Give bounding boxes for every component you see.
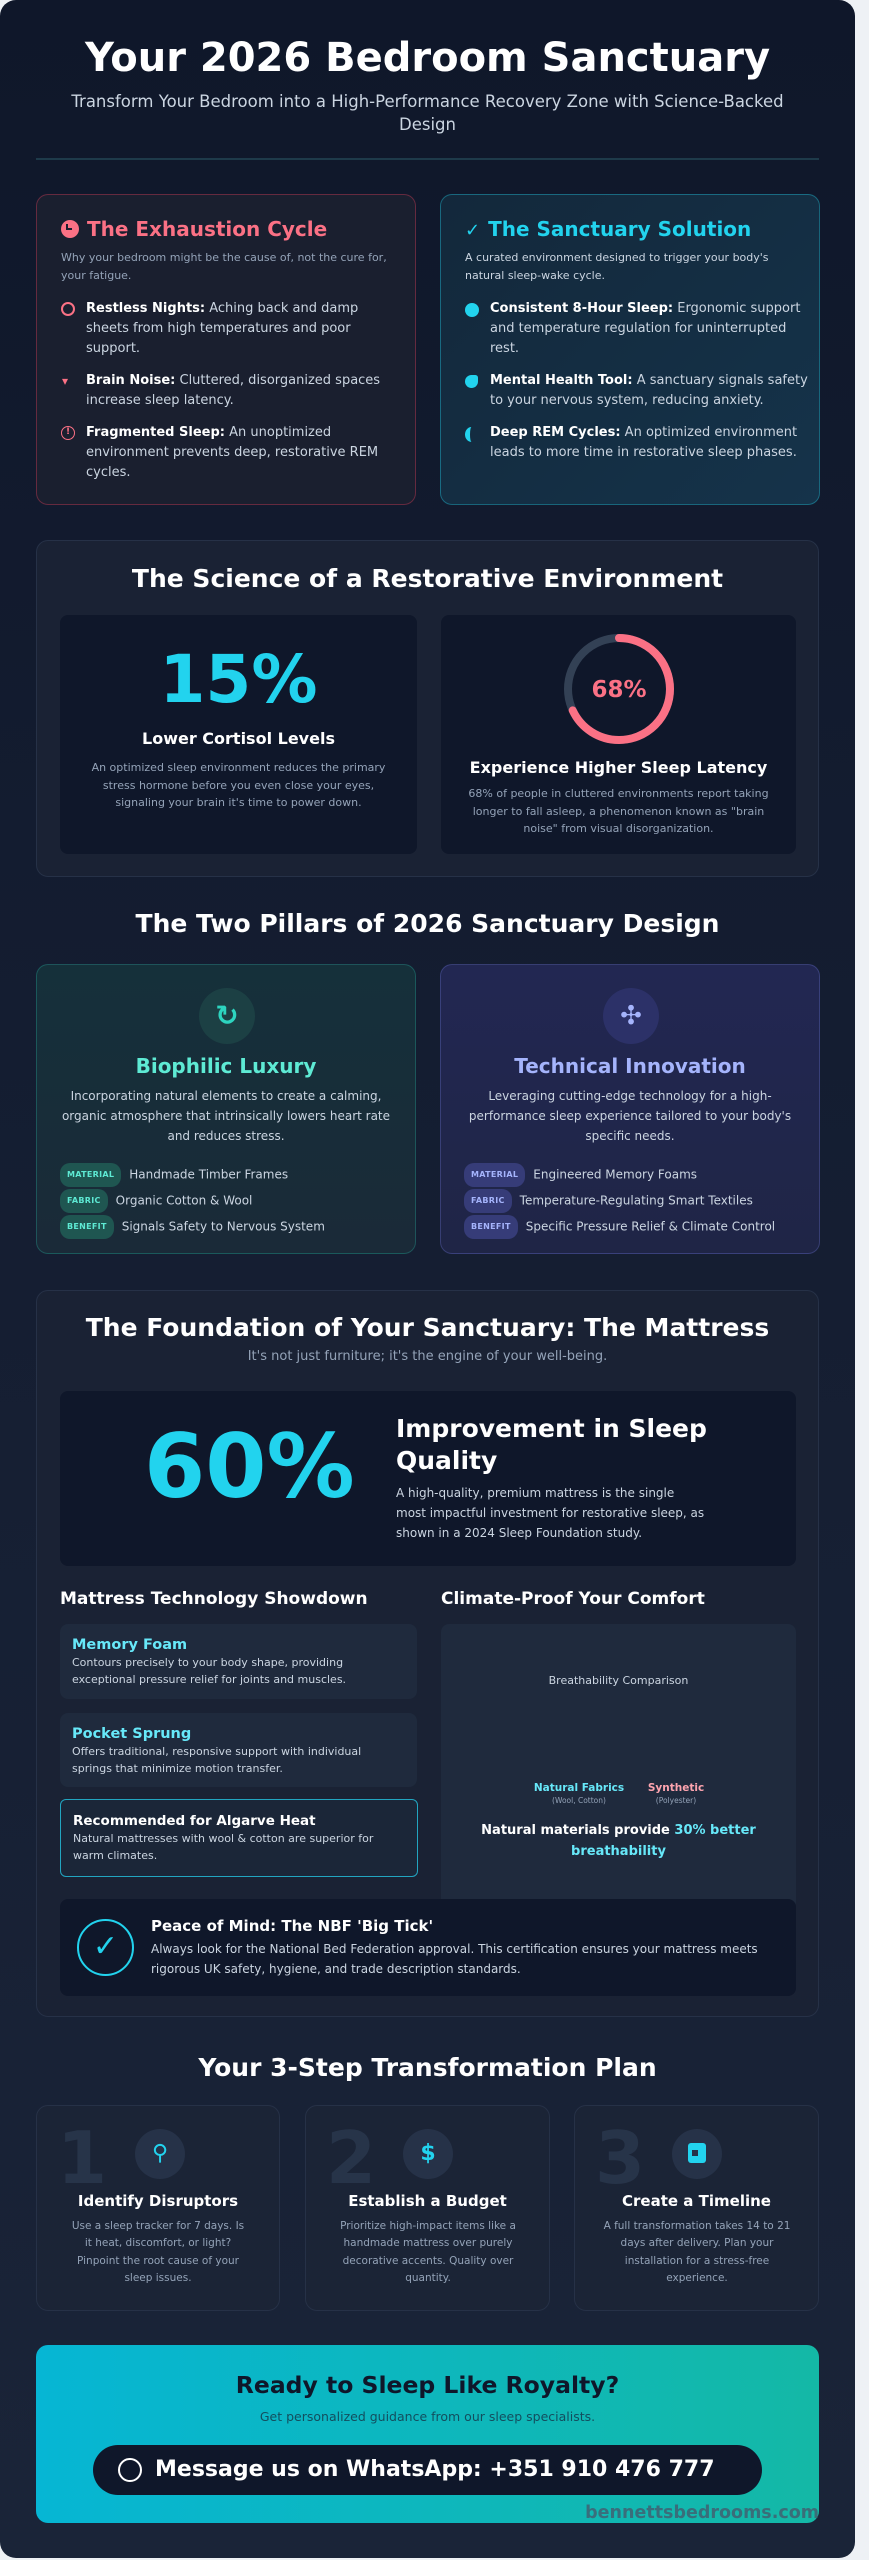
card: algarve heat [60,1799,418,1877]
chart: breathability: (Polyester) [656,1796,696,1805]
panel: biophilic luxury [36,964,416,1254]
text: exhaustion intro: Why your bedroom might be the cause of, not the cure for, your fatigue. [61,251,387,282]
tags: biophilic: Organic Cotton & Wool [116,1194,252,1208]
CTA panel: Ready to Sleep Like Royalty? [236,2371,619,2399]
card: memory foam: Memory Foam [72,1637,187,1653]
stat card: 60% [60,1391,796,1566]
panel: sanctuary solution [440,194,820,505]
icon: dollar: $ [420,2141,436,2166]
panel: technical innovation: Technical Innovation [514,1054,746,1078]
icon: chip [603,988,659,1044]
chart: breathability [441,1624,796,1910]
tags: biophilic: Signals Safety to Nervous System [122,1220,325,1234]
panel: science [36,540,819,877]
stat card: 15%: 15% [160,641,317,718]
step card 2 [305,2105,550,2311]
stat card: 60%: Improvement in Sleep Quality [396,1414,707,1475]
card: algarve heat: Natural mattresses with wool & cotton are superior for warm climates. [73,1832,373,1862]
panel: biophilic luxury: Incorporating natural elements to create a calming, organic atmosphere that intrinsically lowers heart rate and reduces stress. [62,1089,390,1143]
watermark: bennettsbedrooms.com [585,2503,819,2523]
step card 2: Prioritize high-impact items like a handmade mattress over purely decorative accents. Quality over quantity. [340,2220,516,2284]
icon: refresh: ↻ [215,999,239,1032]
heading: tech showdown: Mattress Technology Showdown [60,1589,368,1609]
card: pocket sprung: Offers traditional, responsive support with individual springs that minimize motion transfer. [72,1745,361,1775]
step card 2: 2 [326,2116,376,2200]
tags: technical: Specific Pressure Relief & Climate Control [526,1220,775,1234]
legend: (Wool, Cotton) [552,1796,606,1805]
stat card: 60%: A high-quality, premium mattress is the single most impactful investment for restorative sleep, as shown in a 2024 Sleep Foundation study. [396,1486,704,1540]
tags: biophilic: Handmade Timber Frames [129,1168,288,1182]
list: exhaustion items: ! [66,427,70,437]
card: pocket sprung [60,1713,417,1787]
heading: sanctuary solution: ✓ The Sanctuary Solution [465,217,751,241]
chart: breathability: Breathability Comparison [549,1674,688,1687]
step card 1: Identify Disruptors [78,2192,238,2210]
title: Your 2026 Bedroom Sanctuary [85,35,770,81]
tags: technical: MATERIAL [471,1170,518,1179]
icon: tick circle: ✓ [93,1929,118,1964]
callout: NBF big tick [60,1899,796,1996]
button: whatsapp [93,2445,762,2495]
icon: tick circle [77,1919,134,1976]
tags: technical: Engineered Memory Foams [533,1168,697,1182]
icon: refresh [199,988,255,1044]
step card 3: 3 [595,2116,645,2200]
step card 3: Create a Timeline [622,2192,771,2210]
chart: breathability: Natural materials provide 30% better breathability [481,1823,756,1859]
tags: biophilic: FABRIC [67,1196,101,1205]
panel: technical innovation: Leveraging cutting-edge technology for a high-performance sleep experience tailored to your body's specific needs. [469,1089,791,1143]
legend: Natural Fabrics [534,1782,624,1794]
CTA panel [36,2345,819,2523]
subtitle: Transform Your Bedroom into a High-Performance Recovery Zone with Science-Backed Design [71,92,784,134]
icon: chip: ✣ [620,1001,642,1031]
stat card: 15% [60,615,417,854]
tags: biophilic [60,1163,325,1239]
list: exhaustion items: ▾ [62,374,68,388]
icon: calendar [672,2129,722,2179]
list: exhaustion items: Fragmented Sleep: An unoptimized environment prevents deep, restorative REM cycles. [86,425,378,480]
icon: search: ⚲ [152,2141,168,2166]
list: exhaustion items [61,301,380,480]
heading: mattress: The Foundation of Your Sanctuary: The Mattress [86,1313,769,1342]
list: sanctuary items [465,301,808,460]
heading: climate: Climate-Proof Your Comfort [441,1589,705,1609]
panel: technical innovation [440,964,820,1254]
heading: exhaustion cycle: The Exhaustion Cycle [87,217,327,241]
stat card: 68% ring: Experience Higher Sleep Latency [470,758,767,777]
text: sanctuary intro: A curated environment designed to trigger your body's natural sleep-wake cycle. [465,251,769,282]
tags: biophilic: MATERIAL [67,1170,114,1179]
chart: 68% ring: 68% [591,677,647,703]
card: pocket sprung: Pocket Sprung [72,1726,191,1742]
step card 1: 1 [57,2116,107,2200]
list: sanctuary items: Deep REM Cycles: An optimized environment leads to more time in restorative sleep phases. [490,425,797,460]
step card 2: Establish a Budget [348,2192,507,2210]
heading: two pillars: The Two Pillars of 2026 Sanctuary Design [136,909,719,938]
stat card: 15%: An optimized sleep environment reduces the primary stress hormone before you even close your eyes, signaling your brain it's time to power down. [92,761,385,809]
panel: mattress foundation: It's not just furniture; it's the engine of your well-being. [248,1349,607,1364]
heading: science: The Science of a Restorative Environment [132,564,723,593]
tags: technical [464,1163,775,1239]
icon: search [135,2129,185,2179]
stat card: 68% ring: 68% of people in cluttered environments report taking longer to fall asleep, a phenomenon known as "brain noise" from visual disorganization. [468,787,769,835]
chart: breathability: Synthetic [648,1782,704,1794]
heading: 3-step plan: Your 3-Step Transformation Plan [198,2053,657,2082]
icon: dollar [403,2129,453,2179]
list: sanctuary items: Consistent 8-Hour Sleep: Ergonomic support and temperature regulation for uninterrupted rest. [490,301,800,356]
tags: technical: BENEFIT [471,1222,511,1231]
button: whatsapp: Message us on WhatsApp: +351 910 476 777 [155,2457,714,2482]
step card 3: A full transformation takes 14 to 21 days after delivery. Plan your installation for a stress-free experience. [604,2220,790,2284]
stat card: 68% ring [441,615,796,854]
list: sanctuary items: Mental Health Tool: A sanctuary signals safety to your nervous system, reducing anxiety. [490,373,808,408]
stat card: 15%: Lower Cortisol Levels [142,729,335,748]
card: memory foam: Contours precisely to your body shape, providing exceptional pressure relief for joints and muscles. [72,1656,346,1686]
card: memory foam [60,1624,417,1699]
card: algarve heat: Recommended for Algarve Heat [73,1813,316,1829]
stat card: 60%: 60% [144,1415,355,1518]
callout: NBF big tick: Peace of Mind: The NBF 'Big Tick' [151,1917,433,1935]
list: exhaustion items: Brain Noise: Cluttered, disorganized spaces increase sleep latency. [86,373,380,408]
tags: biophilic: BENEFIT [67,1222,107,1231]
panel: mattress foundation [36,1290,819,2017]
panel: exhaustion cycle [36,194,416,505]
step card 1 [36,2105,280,2311]
callout: NBF big tick: Always look for the National Bed Federation approval. This certification ensures your mattress meets rigorous UK safety, hygiene, and trade description standards. [151,1942,758,1976]
chart: 68% ring [564,634,674,744]
step card 3 [574,2105,819,2311]
list: exhaustion items: Restless Nights: Aching back and damp sheets from high temperatures and poor support. [86,301,358,356]
CTA panel: Get personalized guidance from our sleep specialists. [260,2409,595,2424]
legend [534,1782,624,1805]
panel: biophilic luxury: Biophilic Luxury [136,1054,316,1078]
tags: technical: FABRIC [471,1196,505,1205]
tags: technical: Temperature-Regulating Smart Textiles [520,1194,753,1208]
step card 1: Use a sleep tracker for 7 days. Is it heat, discomfort, or light? Pinpoint the root cause of your sleep issues. [72,2220,244,2284]
